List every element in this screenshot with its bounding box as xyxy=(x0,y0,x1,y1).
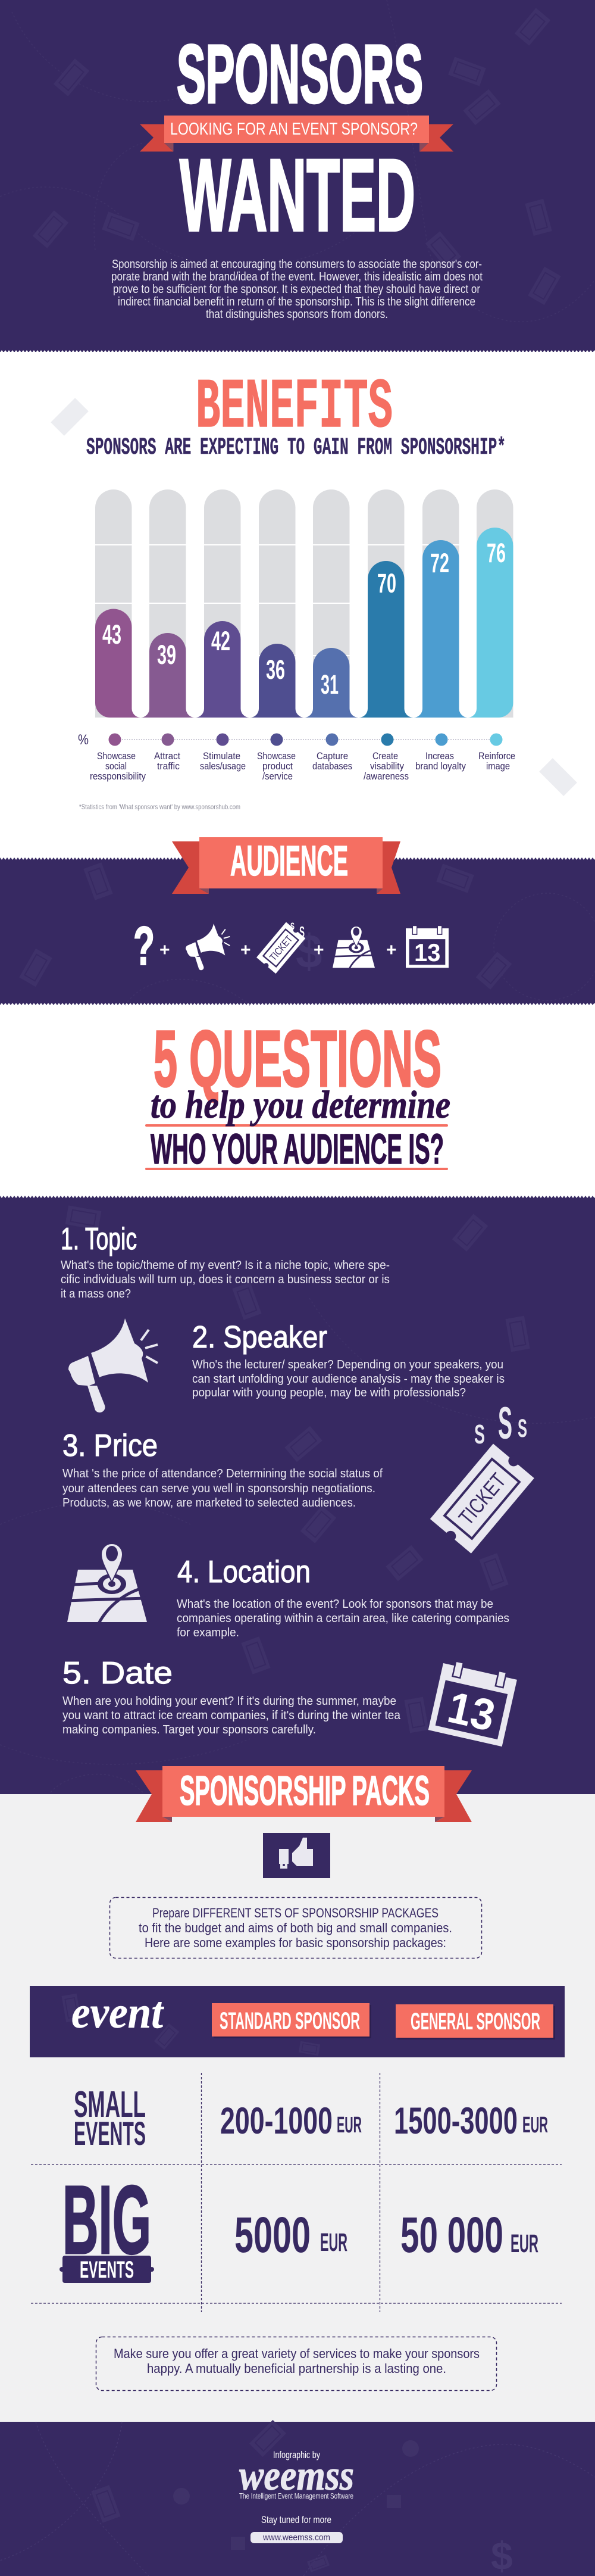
icon: plus: + xyxy=(159,940,170,960)
icon: plus: + xyxy=(386,940,397,960)
icon: calendar xyxy=(406,925,449,968)
bar: stimulate sales: 42 xyxy=(211,626,230,656)
bar: attract traffic: 39 xyxy=(157,640,176,670)
question 5: date: making companies. Target your sponsors carefully. xyxy=(62,1723,316,1736)
label: standard sponsor xyxy=(212,2003,371,2038)
table header xyxy=(30,1986,565,2057)
icon: calendar: 13 xyxy=(443,1682,500,1741)
legend: Showcase xyxy=(97,750,136,762)
panel: hero header xyxy=(0,0,595,353)
bar: capture databases: 31 xyxy=(321,669,339,700)
row label: small events: SMALL xyxy=(74,2084,146,2125)
icon: thumbs up xyxy=(263,1833,330,1878)
question 4: location: for example. xyxy=(177,1626,239,1639)
price: big general: EUR xyxy=(511,2229,538,2258)
question 1: topic: it a mass one? xyxy=(61,1287,131,1301)
question 3: price: What 's the price of attendance? Determining the social status of xyxy=(62,1467,383,1480)
legend: Showcase xyxy=(257,750,296,762)
row label: big events: EVENTS xyxy=(80,2257,134,2283)
callout: make sure: happy. A mutually beneficial partnership is a lasting one. xyxy=(147,2361,446,2376)
bar: create visibility xyxy=(359,561,414,718)
heading: benefits: BENEFITS xyxy=(196,369,393,448)
question 2: speaker xyxy=(192,1320,505,1399)
icon: megaphone xyxy=(68,1318,158,1412)
price: small general: 1500-3000 xyxy=(394,2100,518,2142)
question 4: location: companies operating within a certain area, like catering companies xyxy=(177,1612,509,1625)
legend: Create xyxy=(372,750,398,762)
legend: brand loyalty xyxy=(415,760,466,772)
question 5: date xyxy=(62,1656,401,1736)
legend: traffic xyxy=(157,760,180,772)
panel: audience xyxy=(0,837,595,1006)
price: small standard: EUR xyxy=(337,2113,362,2138)
bar: attract traffic xyxy=(140,633,195,718)
intro paragraph: porate brand with the brand/idea of the event. However, this idealistic aim does not xyxy=(111,270,483,283)
icon: ticket with dollars: S xyxy=(498,1398,512,1449)
row label: big events: BIG xyxy=(62,2165,151,2274)
icon: ticket with dollars xyxy=(427,1398,538,1558)
legend: social xyxy=(105,760,127,772)
question 4: location xyxy=(177,1555,509,1639)
bar: capture databases xyxy=(304,648,359,718)
question 1: topic xyxy=(61,1222,390,1301)
legend: /awareness xyxy=(364,771,409,782)
row label: small events: EVENTS xyxy=(74,2115,146,2152)
icon: calendar xyxy=(428,1658,518,1747)
panel: sponsorship packs xyxy=(0,1766,595,2422)
callout: prepare different sets: Here are some examples for basic sponsorship packages: xyxy=(145,1935,446,1950)
row label: big events xyxy=(60,2165,154,2283)
pricing table xyxy=(31,2073,562,2312)
question 2: speaker: Who's the lecturer/ speaker? Depending on your speakers, you xyxy=(192,1358,503,1371)
icon: ticket xyxy=(255,920,307,975)
price: big standard: 5000 xyxy=(234,2207,311,2263)
ribbon: looking for an event sponsor: LOOKING FOR AN EVENT SPONSOR? xyxy=(170,120,418,139)
question 1: topic: cific individuals will turn up, does it concern a business sector or is xyxy=(61,1273,390,1286)
icon: dollar signs: S xyxy=(299,923,305,941)
subheading: to help you determine: to help you determine xyxy=(151,1083,450,1127)
question 2: speaker: popular with young people, may be with professionals? xyxy=(192,1386,466,1399)
question 3: price xyxy=(62,1429,383,1510)
icon: map pin xyxy=(65,1543,147,1623)
icon: dollar signs xyxy=(290,921,305,941)
question 4: location: What's the location of the event? Look for sponsors that may be xyxy=(177,1598,493,1611)
legend: databases xyxy=(312,760,352,772)
legend: Capture xyxy=(317,750,348,762)
tagline: The Intelligent Event Management Software xyxy=(239,2492,353,2500)
callout: make sure xyxy=(96,2337,496,2390)
legend: /service xyxy=(262,771,293,782)
label: standard sponsor: STANDARD SPONSOR xyxy=(220,2008,360,2034)
legend: Reinforce xyxy=(478,750,515,762)
legend: % xyxy=(78,732,89,748)
legend: sales/usage xyxy=(200,760,246,772)
icon: ticket: TICKET xyxy=(267,934,295,963)
label: general sponsor xyxy=(396,2004,555,2039)
question 3: price: Products, as we know, are marketed to selected audiences. xyxy=(62,1496,356,1510)
question 2: speaker: can start unfolding your audience analysis - may the speaker is xyxy=(192,1373,505,1386)
intro paragraph: indirect financial benefit in return of the sponsorship. This is the slight difference xyxy=(118,295,475,308)
ribbon: audience: AUDIENCE xyxy=(230,838,348,885)
panel: questions xyxy=(0,1196,595,1794)
question 2: speaker: 2. Speaker xyxy=(192,1320,327,1355)
icon: megaphone xyxy=(186,924,230,970)
legend: visability xyxy=(370,760,404,772)
bar: showcase social responsibility: 43 xyxy=(102,619,121,650)
question 3: price: your attendees can serve you well in sponsorship negotiations. xyxy=(62,1482,375,1495)
divider lines xyxy=(145,1124,448,1170)
icon: plus: + xyxy=(314,940,324,960)
callout: prepare different sets xyxy=(109,1897,482,1958)
bar: showcase product: 36 xyxy=(266,654,285,685)
bar: showcase product xyxy=(250,644,304,718)
question 4: location: 4. Location xyxy=(177,1555,311,1589)
bar: reinforce image xyxy=(468,528,513,718)
intro paragraph xyxy=(111,258,483,321)
bar: increase brand loyalty: 72 xyxy=(430,548,449,578)
intro paragraph: that distinguishes sponsors from donors. xyxy=(206,308,388,321)
legend xyxy=(78,732,515,782)
bar: stimulate sales xyxy=(195,621,250,718)
text: infographic by: Infographic by xyxy=(273,2449,320,2460)
ribbon: sponsorship packs xyxy=(136,1766,472,1822)
price: small general: EUR xyxy=(522,2113,548,2138)
intro paragraph: Sponsorship is aimed at encouraging the consumers to associate the sponsor's cor- xyxy=(112,258,482,271)
logo: weemss: weemss xyxy=(239,2452,354,2499)
legend: image xyxy=(486,760,510,772)
question 5: date: you want to attract ice cream companies, if it's during the winter tea xyxy=(62,1709,401,1722)
decoration: faint tickets xyxy=(51,398,577,796)
panel: five questions title xyxy=(145,1015,450,1173)
legend: ressponsibility xyxy=(90,771,146,782)
ribbon: audience xyxy=(172,837,400,894)
callout: prepare different sets: to fit the budget and aims of both big and small companies. xyxy=(139,1920,452,1935)
icon: plus: + xyxy=(240,940,251,960)
bar: increase brand loyalty xyxy=(414,540,468,718)
icon: calendar: 13 xyxy=(414,938,440,966)
panel: benefits xyxy=(51,369,577,811)
icon: question mark: ? xyxy=(133,916,155,977)
icon: ticket with dollars: TICKET xyxy=(454,1468,511,1530)
price: big standard: EUR xyxy=(320,2228,347,2257)
question 1: topic: What's the topic/theme of my event? Is it a niche topic, where spe- xyxy=(61,1259,390,1272)
legend: Increas xyxy=(425,750,454,762)
legend: product xyxy=(262,760,293,772)
legend: Stimulate xyxy=(203,750,240,762)
price: big general: 50 000 xyxy=(400,2207,503,2263)
bar: create visibility: 70 xyxy=(377,568,396,598)
text: stay tuned: Stay tuned for more xyxy=(261,2514,331,2525)
callout: prepare different sets: Prepare DIFFERENT SETS OF SPONSORSHIP PACKAGES xyxy=(152,1906,439,1920)
bar: reinforce image: 76 xyxy=(487,538,506,568)
icon: ticket with dollars: S xyxy=(474,1419,485,1449)
icon: ticket with dollars: S xyxy=(518,1414,527,1443)
panel: audience: $ xyxy=(296,925,322,978)
bar: showcase social responsibility xyxy=(95,609,140,718)
footnote: *Statistics from 'What sponsors want' by www.sponsorshub.com xyxy=(79,803,240,811)
question 3: price: 3. Price xyxy=(62,1429,158,1463)
row label: small events xyxy=(74,2084,146,2152)
question 5: date: When are you holding your event? If it's during the summer, maybe xyxy=(62,1695,396,1708)
question 5: date: 5. Date xyxy=(62,1656,173,1691)
label: event: event xyxy=(71,1988,165,2038)
icon: dollar signs: S xyxy=(290,921,295,932)
website pill: www.weemss.com xyxy=(262,2533,330,2543)
price: small standard: 200-1000 xyxy=(220,2100,333,2142)
panel: footer xyxy=(0,2420,595,2576)
legend: Attract xyxy=(154,750,180,762)
ribbon: looking for an event sponsor xyxy=(140,116,453,151)
callout: make sure: Make sure you offer a great variety of services to make your sponsors xyxy=(114,2346,480,2361)
bar chart xyxy=(89,489,518,718)
icon: map pin xyxy=(331,926,375,968)
intro paragraph: prove to be sufficient for the sponsor. It is expected that they should have direct or xyxy=(113,283,480,296)
question 1: topic: 1. Topic xyxy=(61,1222,137,1256)
